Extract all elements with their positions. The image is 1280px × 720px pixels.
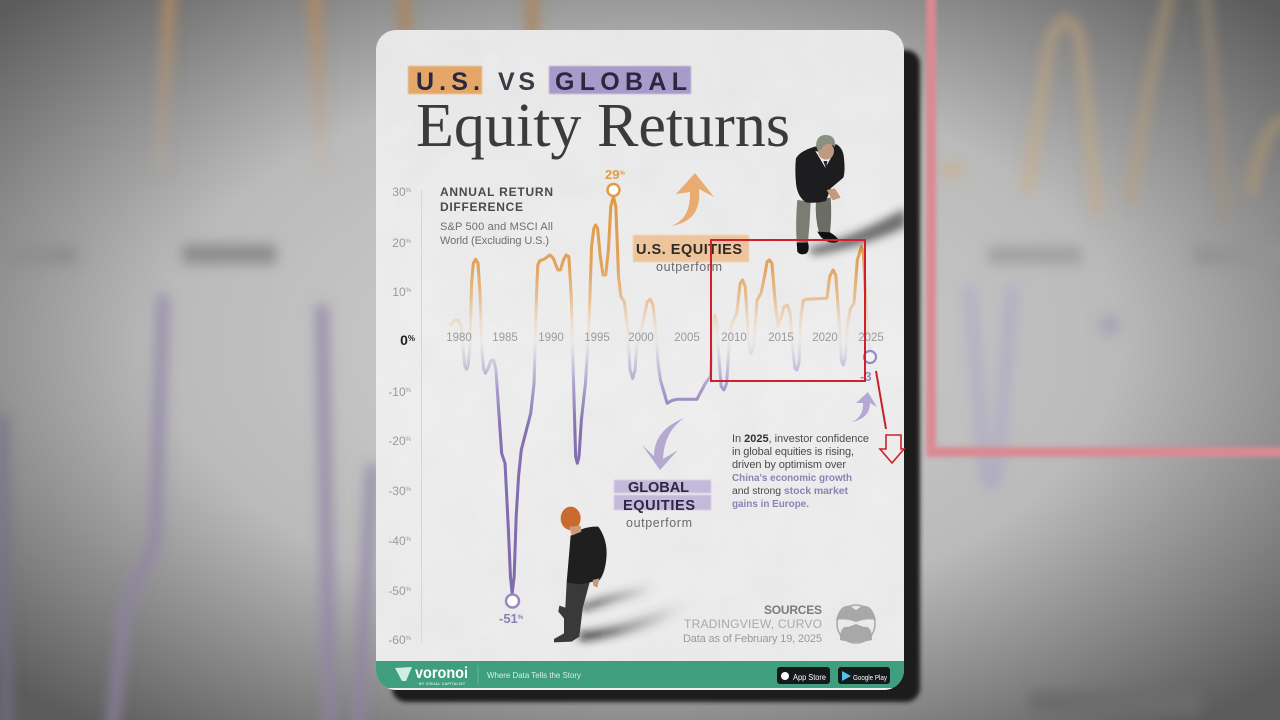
badge: App Store: App Store <box>793 673 827 682</box>
footer bar: BY VISUAL CAPITALIST <box>419 682 466 686</box>
label: global equities: outperform <box>626 516 692 530</box>
y axis: % <box>406 537 412 543</box>
badge: Google Play <box>838 667 890 684</box>
y axis: % <box>406 636 412 642</box>
sources: SOURCES <box>764 603 822 617</box>
chart subtitle: ANNUAL RETURN <box>440 185 553 199</box>
annotation text: gains in Europe. <box>732 498 809 510</box>
jacket <box>795 144 845 203</box>
annotation text: driven by optimism over <box>732 459 846 471</box>
y axis: % <box>406 587 412 593</box>
y axis: -30 <box>388 484 406 498</box>
y axis: % <box>406 388 412 394</box>
y axis: -20 <box>388 434 406 448</box>
x axis years: 2010 <box>721 332 747 344</box>
annotation text: and strong stock market <box>732 485 848 497</box>
arrow: small purple <box>852 392 877 422</box>
infographic card <box>376 30 906 690</box>
legs <box>796 200 811 242</box>
voronoi logo mark <box>395 667 412 681</box>
chart subtitle <box>440 185 553 247</box>
peak marker: 29%: 29 <box>605 167 619 182</box>
label: U.S. equities: U.S. EQUITIES <box>636 242 742 258</box>
legs <box>554 581 590 642</box>
label: U.S. equities: outperform <box>656 260 722 274</box>
y axis: 30 <box>392 185 406 199</box>
sources: TRADINGVIEW, CURVO <box>684 617 822 631</box>
label: U.S. equities <box>633 235 749 274</box>
head <box>561 507 581 530</box>
title line 1: GLOBAL <box>555 68 687 96</box>
line chart: return difference <box>450 197 870 593</box>
y axis: 0 <box>400 332 408 348</box>
highlight: U.S. <box>408 66 482 94</box>
x axis years: 2025 <box>858 332 884 344</box>
highlight: Global <box>549 66 691 94</box>
figure: man in suit, right <box>795 135 906 256</box>
annotation text: In 2025, investor confidence <box>732 433 869 445</box>
y axis: 20 <box>392 236 406 250</box>
hands <box>827 188 841 200</box>
title line 1 <box>418 72 686 90</box>
chart subtitle: S&P 500 and MSCI All <box>440 221 553 233</box>
head <box>818 142 834 160</box>
annotation text: in global equities is rising, <box>732 446 854 458</box>
shoes <box>797 242 809 254</box>
footer bar <box>376 661 904 690</box>
arrow: global down <box>642 418 684 470</box>
jacket <box>567 527 607 584</box>
y axis: % <box>406 188 412 194</box>
x axis years: 1990 <box>538 332 564 344</box>
figure: man in suit, left <box>554 507 683 642</box>
title <box>408 66 790 160</box>
title line 1: VS <box>498 68 535 96</box>
x axis years: 1980 <box>446 332 472 344</box>
label: global equities <box>614 480 711 530</box>
red highlight rectangle <box>711 240 865 381</box>
y axis: % <box>408 334 415 343</box>
latest marker: -3%: -3 <box>860 369 872 384</box>
x axis years: 1985 <box>492 332 518 344</box>
card drop shadow <box>392 50 920 702</box>
badge: Google Play: Google Play <box>853 675 887 682</box>
x axis years: 1995 <box>584 332 610 344</box>
peak marker: 29% <box>605 167 625 196</box>
sources <box>683 603 822 645</box>
y axis: % <box>406 239 412 245</box>
peak marker: 29%: % <box>619 171 625 177</box>
shadow <box>808 208 906 256</box>
logo: gray mustache mark <box>836 605 876 643</box>
annotation text <box>732 433 869 510</box>
y axis: % <box>406 437 412 443</box>
x axis years: 2015 <box>768 332 794 344</box>
arrow: U.S. up <box>671 173 714 226</box>
x axis years: 2005 <box>674 332 700 344</box>
title line 1: U.S. <box>416 68 480 96</box>
title line 2: Equity Returns <box>416 92 790 160</box>
trough marker: -51% <box>499 594 524 626</box>
chart subtitle: World (Excluding U.S.) <box>440 235 549 247</box>
x axis years: 2000 <box>628 332 654 344</box>
x axis years <box>447 332 884 341</box>
y axis: -50 <box>388 584 406 598</box>
y axis: % <box>406 487 412 493</box>
voronoi wordmark: voronoi <box>415 665 468 682</box>
chart subtitle: DIFFERENCE <box>440 200 523 214</box>
trough marker: -51%: -51 <box>499 611 518 626</box>
red pointer line <box>876 371 886 429</box>
badge: App Store <box>777 667 830 684</box>
label: global equities: EQUITIES <box>623 498 695 514</box>
y axis: -10 <box>388 385 406 399</box>
trough marker: -51%: % <box>518 615 524 621</box>
y axis: 10 <box>392 285 406 299</box>
sources: Data as of February 19, 2025 <box>683 633 822 645</box>
y axis: -60 <box>388 633 406 647</box>
red hollow down arrow <box>880 435 904 463</box>
tagline: Where Data Tells the Story <box>487 670 582 680</box>
y axis: -40 <box>388 534 406 548</box>
annotation text: China's economic growth <box>732 472 852 484</box>
x axis years: 2020 <box>812 332 838 344</box>
label: global equities: GLOBAL <box>628 480 689 496</box>
figure shadows <box>581 583 655 611</box>
latest marker: -3% <box>860 351 876 384</box>
y axis: % <box>406 288 412 294</box>
y axis <box>388 185 422 647</box>
